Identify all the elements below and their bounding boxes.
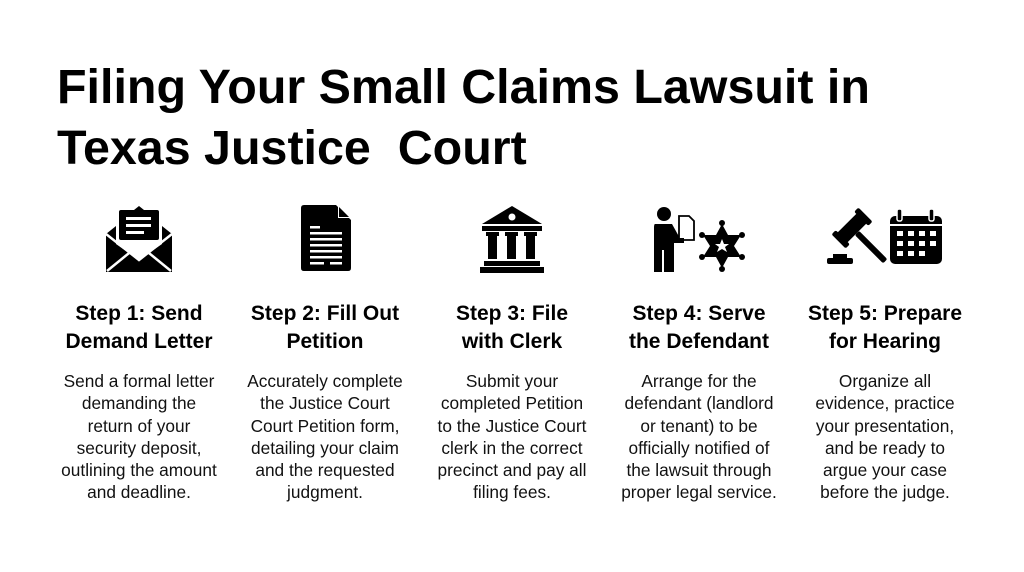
step 1: outlining the amount: [61, 460, 217, 480]
step 3: with Clerk: [462, 330, 562, 353]
step 5: your presentation,: [816, 416, 954, 436]
step 2: Petition: [286, 330, 364, 353]
step 4: the lawsuit through: [626, 460, 772, 480]
step 5: before the judge.: [820, 482, 950, 502]
icon: envelope: [106, 206, 172, 272]
step 3: [438, 302, 586, 502]
step 5: for Hearing: [829, 330, 941, 353]
step 5: evidence, practice: [815, 393, 955, 413]
step 2: detailing your claim: [251, 438, 399, 458]
step 2: Step 2: Fill Out: [251, 302, 399, 325]
step 1: [61, 302, 217, 502]
step 5: Step 5: Prepare: [808, 302, 962, 325]
step 3: precinct and pay all: [438, 460, 586, 480]
step 4: defendant (landlord: [625, 393, 773, 413]
step 5: and be ready to: [825, 438, 945, 458]
step 1: demanding the: [82, 393, 196, 413]
step 5: argue your case: [823, 460, 947, 480]
step 1: security deposit,: [77, 438, 201, 458]
step 2: judgment.: [287, 482, 363, 502]
icon: document: [301, 205, 351, 271]
icon: gavel and calendar: [827, 208, 942, 264]
step 3: to the Justice Court: [438, 416, 586, 436]
title: [57, 60, 870, 175]
step 3: Step 3: File: [456, 302, 568, 325]
step 3: Submit your: [466, 371, 558, 391]
step 1: return of your: [88, 416, 190, 436]
step 2: and the requested: [255, 460, 395, 480]
icon: courthouse: [480, 206, 544, 273]
step 3: filing fees.: [473, 482, 551, 502]
step 1: Demand Letter: [65, 330, 213, 353]
step 4: Arrange for the: [641, 371, 757, 391]
step 4: proper legal service.: [621, 482, 777, 502]
step 5: [808, 302, 962, 502]
step 5: Organize all: [839, 371, 931, 391]
step 1: and deadline.: [87, 482, 191, 502]
title: Filing Your Small Claims Lawsuit in: [57, 60, 870, 114]
step 2: Court Petition form,: [251, 416, 399, 436]
step 2: the Justice Court: [260, 393, 390, 413]
step 1: Step 1: Send: [75, 302, 203, 325]
title: Texas Justice Court: [57, 121, 527, 175]
step 4: or tenant) to be: [640, 416, 758, 436]
step 4: [621, 302, 777, 502]
step 3: clerk in the correct: [441, 438, 583, 458]
step 4: officially notified of: [629, 438, 769, 458]
step 3: completed Petition: [441, 393, 583, 413]
step 2: Accurately complete: [247, 371, 403, 391]
step 2: [247, 302, 403, 502]
icon: person serving with sheriff star: [654, 207, 745, 272]
step 4: the Defendant: [629, 330, 769, 353]
step 1: Send a formal letter: [64, 371, 214, 391]
step 4: Step 4: Serve: [632, 302, 766, 325]
